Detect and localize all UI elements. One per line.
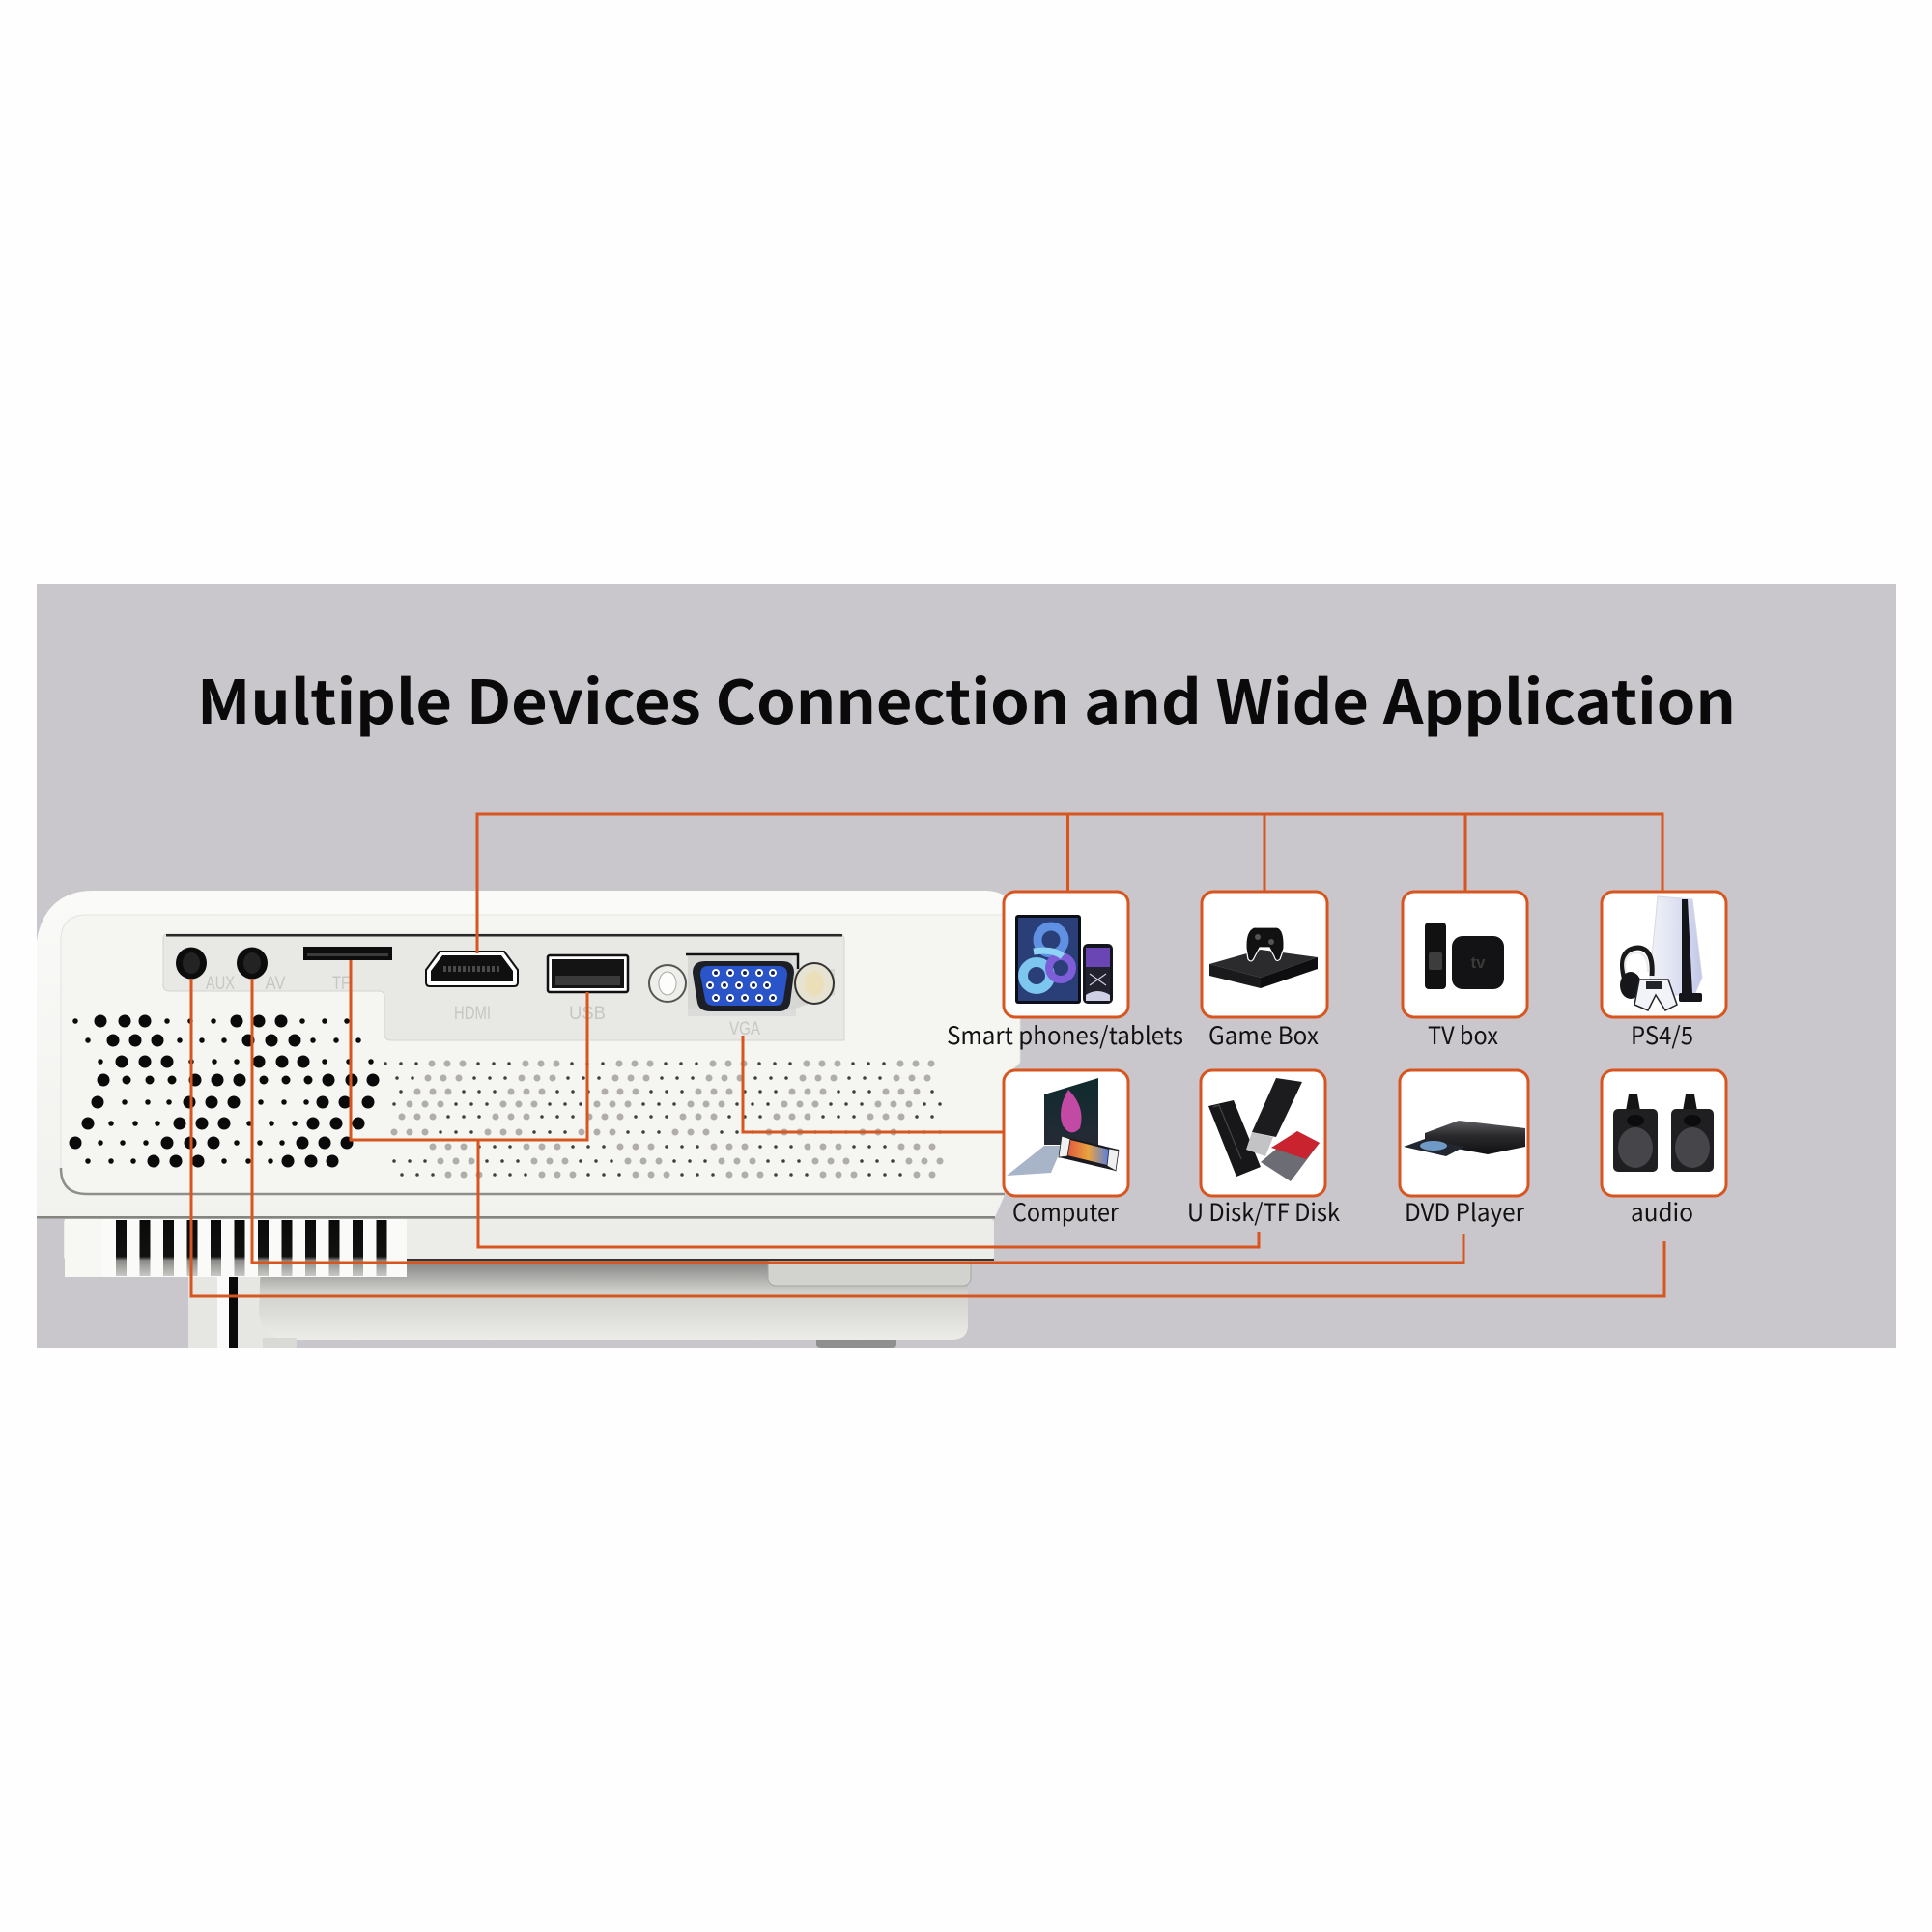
device card: audio	[1602, 1070, 1726, 1196]
label: U Disk/TF Disk: U Disk/TF Disk	[1187, 1194, 1340, 1229]
label: Smart phones/tablets: Smart phones/tablets	[947, 1017, 1183, 1052]
wire: TF and USB to U Disk	[351, 960, 1259, 1247]
projector illustration	[37, 891, 1020, 1348]
icon: controller	[1634, 980, 1677, 1010]
projector side band	[64, 1219, 994, 1277]
black speaker grille	[75, 1021, 373, 1161]
port labels: HDMI	[454, 1004, 491, 1024]
label: audio: audio	[1631, 1194, 1693, 1229]
label: TV box: TV box	[1428, 1017, 1499, 1052]
icon: right speaker	[1671, 1094, 1714, 1172]
icon: tablet	[1015, 915, 1081, 1004]
TF card slot	[303, 947, 392, 960]
port labels: AUX	[206, 974, 235, 994]
icon: USB stick two	[1246, 1078, 1302, 1156]
projector lower body	[188, 1256, 971, 1348]
HDMI port	[426, 952, 518, 986]
device card: DVD player	[1400, 1070, 1528, 1196]
icon: laptop	[1007, 1078, 1098, 1176]
wire: HDMI to top-row devices	[477, 814, 1662, 953]
label: DVD Player: DVD Player	[1405, 1194, 1524, 1229]
gray background panel	[37, 584, 1896, 1348]
port labels	[206, 974, 760, 1039]
icon: disc tray	[1404, 1139, 1464, 1156]
icon: handheld console	[1059, 1136, 1119, 1171]
AUX jack	[176, 947, 207, 980]
VGA port	[649, 954, 835, 1016]
icon: console	[1209, 950, 1318, 988]
port labels: VGA	[729, 1019, 760, 1039]
icon: TV box: tv	[1470, 953, 1486, 972]
wire: AV to DVD Player	[252, 979, 1463, 1263]
wire: AUX to audio	[191, 979, 1664, 1296]
device card: U disk / TF disk	[1201, 1070, 1325, 1196]
device card: smart phones/tablets	[1004, 892, 1128, 1017]
icon: left speaker	[1613, 1094, 1658, 1172]
port labels: AV	[265, 974, 286, 994]
title: Multiple Devices Connection and Wide Application	[197, 654, 1736, 741]
device card: computer	[1004, 1070, 1128, 1196]
icon: console tower	[1650, 896, 1702, 1002]
rear vent slats	[102, 1219, 407, 1277]
label: Game Box: Game Box	[1208, 1017, 1320, 1052]
gray dotted grille	[385, 1064, 942, 1175]
port labels: TF	[332, 974, 350, 994]
USB port	[548, 955, 628, 992]
icon: memory card	[1261, 1131, 1320, 1181]
icon: USB stick one	[1208, 1100, 1261, 1177]
front face panel	[61, 915, 1020, 1194]
icon: remote	[1425, 923, 1446, 989]
wire: VGA to Computer	[743, 1036, 1005, 1132]
label: PS4/5: PS4/5	[1631, 1017, 1693, 1052]
projector shell	[37, 891, 1020, 1217]
icon: phone	[1083, 944, 1113, 1004]
device card: game box	[1202, 892, 1327, 1017]
orange connection wires	[191, 814, 1664, 1296]
device card: PS4/5	[1602, 892, 1726, 1017]
icon: DVD player body	[1425, 1121, 1525, 1154]
icon: headset	[1620, 948, 1652, 999]
AV jack	[237, 947, 268, 980]
port labels: USB	[569, 1004, 606, 1024]
device card: TV box	[1403, 892, 1527, 1017]
port recess	[163, 934, 844, 1040]
icon: game controller	[1246, 927, 1284, 961]
label: Computer: Computer	[1012, 1194, 1119, 1229]
